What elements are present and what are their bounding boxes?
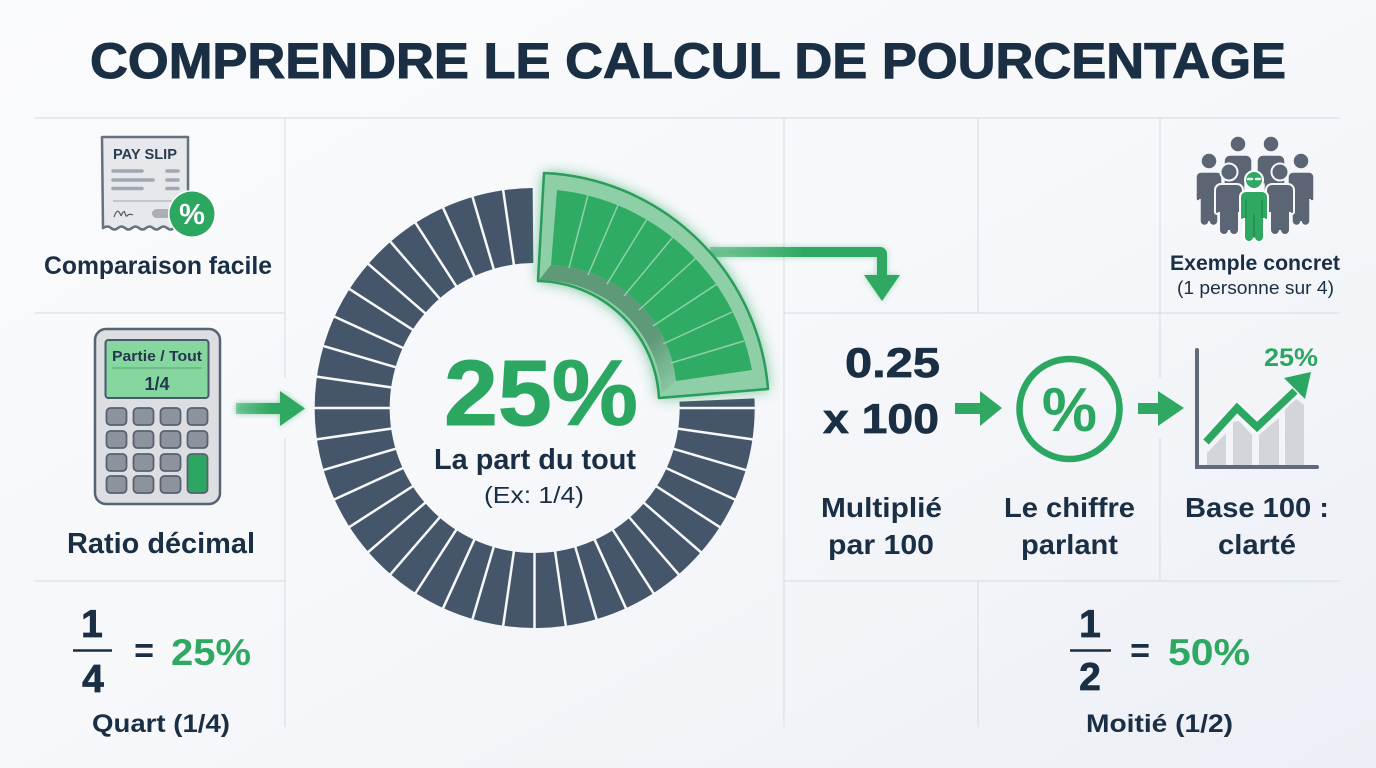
panel: ratio décimal xyxy=(67,329,255,560)
icon: percent circle xyxy=(1020,359,1120,459)
icon: pay slip xyxy=(102,137,216,238)
panel: multiplié par 100 xyxy=(821,339,942,560)
panel: fraction moitié xyxy=(1070,603,1250,738)
arrow: sector to multiplication xyxy=(710,247,900,301)
arrow: percent to chart xyxy=(1138,391,1184,426)
panel: le chiffre parlant xyxy=(1004,359,1135,560)
panel: fraction quart xyxy=(73,603,251,738)
icon: rising chart: 25% xyxy=(1264,344,1318,372)
center value 25%: 25% xyxy=(444,341,638,445)
icon: calculator: Partie / Tout xyxy=(112,348,202,365)
panel: base 100 xyxy=(1185,344,1329,560)
equals: = xyxy=(1130,632,1150,670)
fraction 1/4: 1 xyxy=(81,603,103,646)
label: exemple concret: Exemple concret xyxy=(1170,252,1340,275)
calculation xyxy=(823,339,940,442)
panel: comparaison facile xyxy=(44,137,272,280)
icon: pay slip: PAY SLIP xyxy=(113,147,177,163)
label: multiplié par 100: Multiplié xyxy=(821,492,942,523)
label: base 100 clarté: clarté xyxy=(1218,529,1296,560)
equals: = xyxy=(134,632,154,670)
sector: green 25 percent xyxy=(538,173,768,398)
center label: La part du tout xyxy=(434,444,636,476)
icon: percent circle: % xyxy=(1042,376,1097,445)
icon: rising chart xyxy=(1197,344,1318,467)
label: comparaison facile: Comparaison facile xyxy=(44,252,272,280)
fraction 1/4 xyxy=(73,603,112,701)
fraction 1/2: 1 xyxy=(1079,603,1101,646)
fraction 1/2: 2 xyxy=(1079,656,1101,699)
icon: calculator: 1/4 xyxy=(144,374,170,394)
fraction 1/2 xyxy=(1070,603,1111,699)
calculation: 0.25 xyxy=(845,339,940,386)
label: multiplié par 100: par 100 xyxy=(828,529,934,560)
fraction 1/4: 4 xyxy=(82,658,104,701)
label: quart: Quart (1/4) xyxy=(92,710,230,738)
center sublabel: (Ex: 1/4) xyxy=(484,482,584,508)
label: le chiffre parlant: Le chiffre xyxy=(1004,492,1135,523)
label: ratio décimal: Ratio décimal xyxy=(67,528,255,560)
arrow: calculator to ring xyxy=(236,391,305,426)
ring: dark segments xyxy=(312,188,757,630)
label: base 100 clarté: Base 100 : xyxy=(1185,492,1329,523)
label: le chiffre parlant xyxy=(1004,492,1135,560)
value 50%: 50% xyxy=(1168,632,1250,673)
icon: group of people xyxy=(1196,136,1314,242)
arrow: calculation to percent xyxy=(955,391,1002,426)
calculation: x 100 xyxy=(823,395,939,442)
donut chart: 25 percent xyxy=(312,173,900,630)
icon: pay slip: % xyxy=(179,199,205,231)
label: base 100 clarté xyxy=(1185,492,1329,560)
value 25%: 25% xyxy=(171,632,251,673)
panel: exemple concret xyxy=(1170,136,1340,298)
sublabel: 1 personne sur 4: (1 personne sur 4) xyxy=(1177,277,1334,298)
label: multiplié par 100 xyxy=(821,492,942,560)
label: moitié: Moitié (1/2) xyxy=(1086,710,1233,738)
label: le chiffre parlant: parlant xyxy=(1021,529,1118,560)
icon: calculator xyxy=(95,329,220,504)
title: COMPRENDRE LE CALCUL DE POURCENTAGE xyxy=(90,33,1286,89)
